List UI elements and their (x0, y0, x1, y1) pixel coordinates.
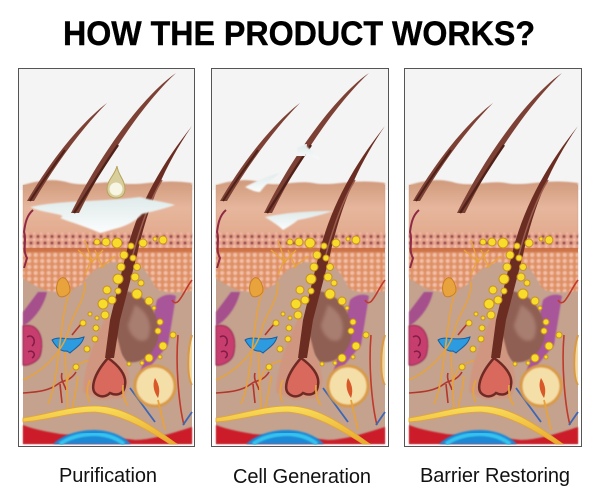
hair strand (457, 73, 562, 213)
white cleansing film (30, 197, 175, 233)
gap in hair (296, 144, 307, 156)
label: cell generation: Cell Generation (233, 466, 371, 488)
label: purification: Purification (59, 465, 157, 487)
panel: barrier restoring (404, 68, 582, 446)
title: HOW THE PRODUCT WORKS? (63, 15, 535, 53)
skin cross-section illustration (216, 103, 385, 444)
skin cross-section illustration (409, 103, 578, 444)
hair strand (71, 73, 176, 213)
panel: purification (18, 68, 194, 446)
oil droplet (107, 166, 125, 198)
skin cross-section illustration (23, 103, 192, 444)
white flakes (245, 145, 333, 230)
hair strand (264, 73, 369, 213)
panel: cell generation (212, 68, 388, 446)
label: barrier restoring: Barrier Restoring (420, 465, 570, 487)
